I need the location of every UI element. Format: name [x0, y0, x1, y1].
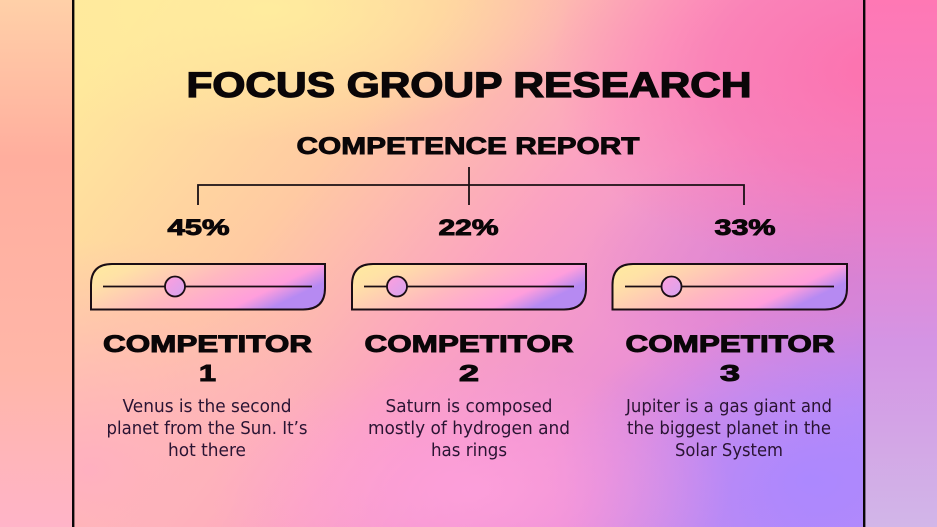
panel: competitor 1 [91, 264, 325, 461]
competitor 2 description: mostly of hydrogen and [368, 419, 570, 439]
competitor 3 heading: COMPETITOR [626, 331, 834, 358]
slider card 2 [352, 264, 586, 310]
competitor 1 description: Venus is the second [122, 397, 292, 417]
percentage: 33%: 33% [714, 215, 776, 240]
competitor 1 description [106, 397, 308, 461]
percentage: 22%: 22% [438, 215, 498, 240]
competitor 2 number: 2 [459, 360, 479, 386]
competitor 1 heading: COMPETITOR [103, 331, 312, 358]
title: FOCUS GROUP RESEARCH [186, 66, 752, 105]
competitor 3 description: Jupiter is a gas giant and [625, 397, 832, 417]
competitor 1 number: 1 [199, 360, 216, 386]
panel: competitor 3 [612, 264, 847, 461]
competitor 1 description: hot there [168, 441, 246, 461]
slider card 3 [612, 264, 847, 310]
competitor 2 description [368, 397, 570, 461]
competitor 2 description: has rings [431, 441, 507, 461]
competitor 3 number: 3 [720, 360, 740, 386]
percentage: 45%: 45% [168, 215, 230, 240]
bracket connector [198, 167, 744, 205]
competitor 2 description: Saturn is composed [386, 397, 552, 417]
slider card 1 [91, 264, 325, 310]
competitor 3 description: the biggest planet in the [627, 419, 831, 439]
panel: competitor 2 [352, 264, 586, 461]
competitor 3 description [625, 397, 832, 461]
competitor 1 description: planet from the Sun. It’s [106, 419, 308, 439]
subtitle: COMPETENCE REPORT [296, 133, 640, 160]
competitor 2 heading: COMPETITOR [364, 331, 574, 358]
competitor 3 description: Solar System [675, 441, 783, 461]
